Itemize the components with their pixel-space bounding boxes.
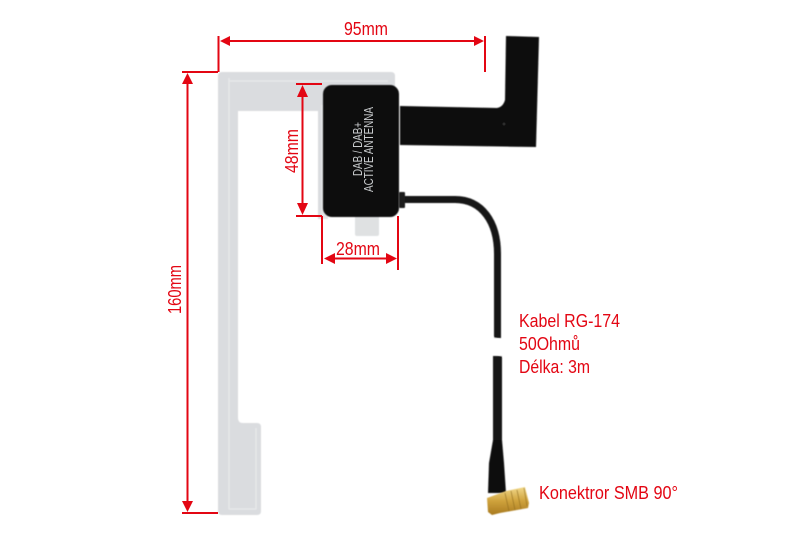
dimension: 48mm (282, 84, 322, 216)
module label: DAB / DAB+ (351, 122, 365, 176)
cable specification: Kabel RG-174 (519, 311, 620, 331)
connector sleeve (488, 440, 506, 493)
dot on film (502, 122, 506, 126)
cable specification: 50Ohmů (519, 334, 580, 354)
cable specification (519, 311, 620, 377)
dimension: 48mm: 48mm (282, 129, 302, 173)
cable break (490, 336, 506, 358)
connector label: Konektror SMB 90° (539, 483, 678, 503)
module label (351, 106, 376, 192)
module housing (323, 85, 399, 217)
release tab (355, 215, 379, 236)
coaxial cable (399, 192, 506, 493)
dimension: 95mm: 95mm (344, 19, 388, 39)
dimension: 28mm (322, 216, 398, 270)
antenna film (400, 36, 539, 147)
adhesive plate (218, 72, 395, 515)
dimension: 28mm: 28mm (336, 239, 380, 259)
dimension: 160mm (165, 72, 218, 513)
SMB connector (487, 487, 529, 515)
cable grommet (399, 192, 405, 208)
cable specification: Délka: 3m (519, 357, 590, 377)
dimension: 95mm (218, 19, 485, 72)
dimension: 160mm: 160mm (165, 265, 185, 314)
module label: ACTIVE ANTENNA (362, 106, 376, 192)
